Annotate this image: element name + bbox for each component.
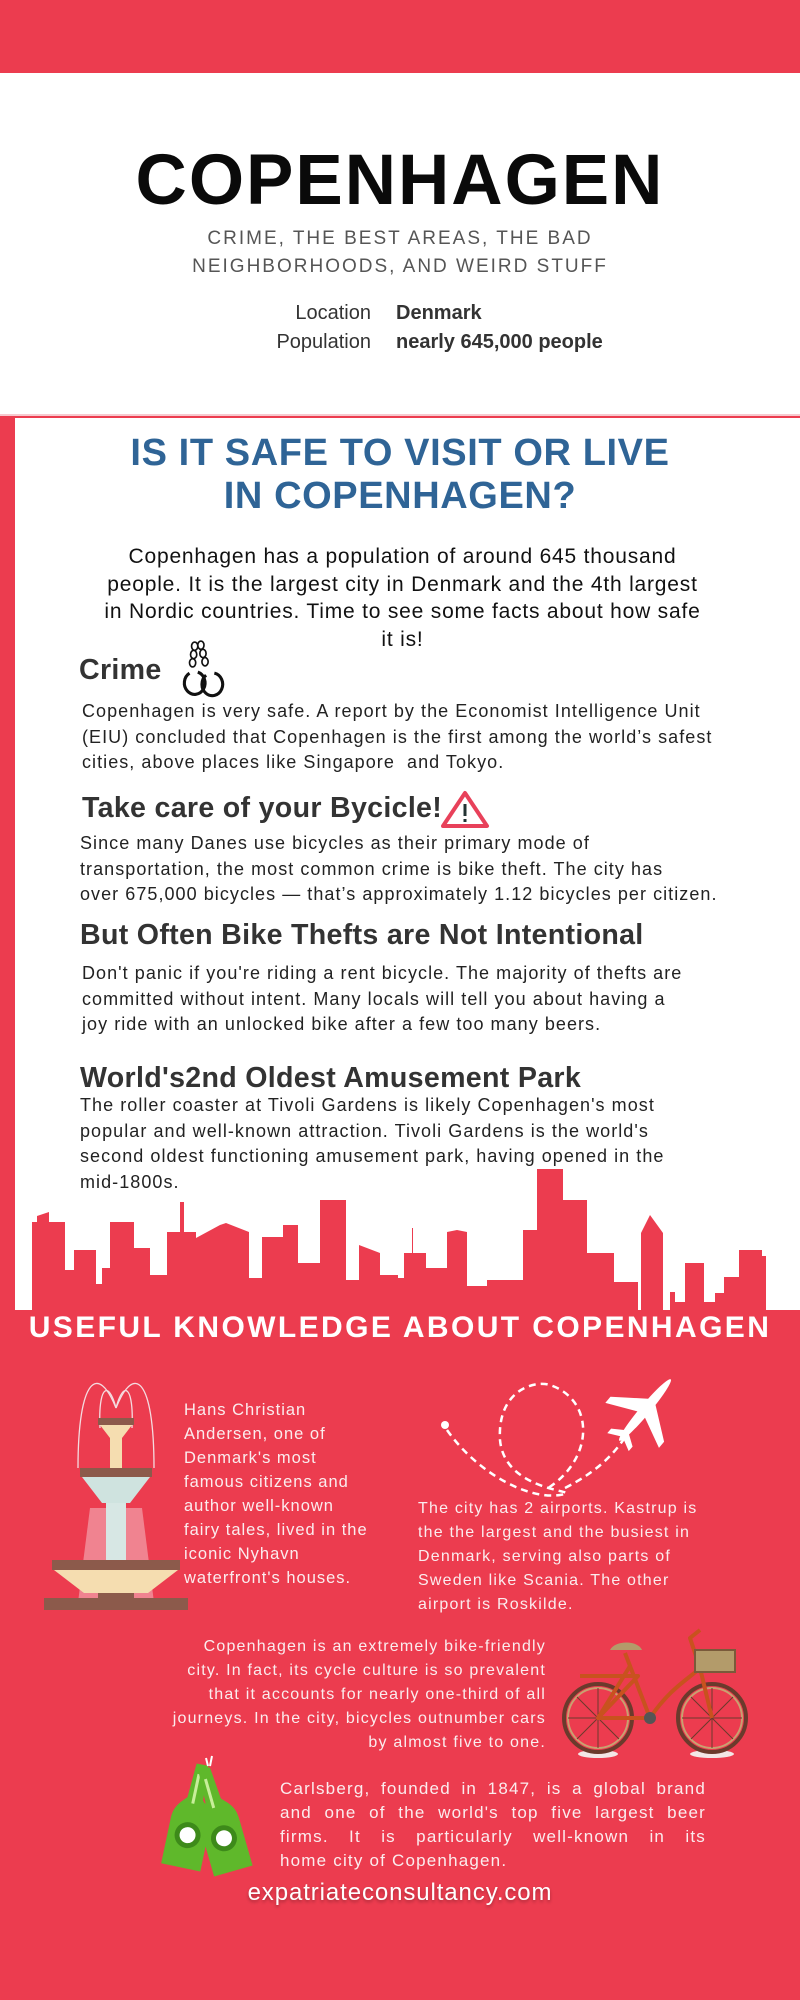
intro paragraph: Copenhagen has a population of around 645 thousand [129, 545, 676, 568]
bike text: Copenhagen is an extremely bike-friendly [204, 1638, 546, 1655]
location info: nearly 645,000 people [396, 331, 603, 353]
HCA text: famous citizens and [184, 1473, 349, 1491]
footer url: expatriateconsultancy.com [248, 1879, 552, 1906]
HCA text: author well-known [184, 1497, 334, 1515]
icon: beer bottles [161, 1756, 252, 1876]
crime text: cities, above places like Singapore and Tokyo. [82, 752, 504, 772]
intro paragraph: it is! [381, 628, 424, 650]
HCA text [184, 1401, 368, 1587]
intro paragraph: people. It is the largest city in Denmark and the 4th largest [107, 572, 698, 596]
airport text: airport is Roskilde. [418, 1596, 574, 1613]
airport text: The city has 2 airports. Kastrup is [418, 1500, 697, 1517]
location info: Population [276, 331, 371, 353]
icon: fountain [44, 1382, 188, 1610]
HCA text: waterfront's houses. [184, 1569, 351, 1587]
subtitle: NEIGHBORHOODS, AND WEIRD STUFF [192, 256, 608, 277]
title: COPENHAGEN [136, 141, 664, 220]
carlsberg text: and one of the world's top five largest beer [280, 1803, 706, 1822]
HCA text: iconic Nyhavn [184, 1545, 300, 1563]
bike text [172, 1638, 546, 1751]
park heading: World's2nd Oldest Amusement Park [80, 1062, 581, 1094]
airport text: Sweden like Scania. The other [418, 1572, 670, 1589]
airport text: the the largest and the busiest in [418, 1524, 690, 1541]
subtitle [192, 228, 608, 277]
crime heading: Crime [79, 654, 162, 686]
bike text: journeys. In the city, bicycles outnumber cars [173, 1710, 546, 1727]
park text: mid-1800s. [80, 1172, 180, 1192]
safety heading: IN COPENHAGEN? [224, 475, 576, 517]
top red bar [0, 0, 800, 73]
bike text: by almost five to one. [368, 1734, 546, 1751]
airport text [418, 1500, 697, 1613]
HCA text: Denmark's most [184, 1449, 317, 1467]
location info: Location [295, 302, 371, 324]
safety heading: IS IT SAFE TO VISIT OR LIVE [130, 432, 670, 474]
bike text: city. In fact, its cycle culture is so prevalent [187, 1662, 546, 1679]
carlsberg text: firms. It is particularly well-known in its [280, 1827, 706, 1846]
thefts text [82, 963, 682, 1034]
safety heading [130, 432, 670, 517]
crime text [82, 701, 712, 772]
header panel [0, 73, 800, 416]
bike text: that it accounts for nearly one-third of all [209, 1686, 546, 1703]
carlsberg text: Carlsberg, founded in 1847, is a global brand [280, 1779, 706, 1798]
main white panel [15, 418, 800, 1310]
park text [80, 1095, 664, 1192]
thefts text: Don't panic if you're riding a rent bicycle. The majority of thefts are [82, 963, 682, 983]
intro paragraph [104, 545, 701, 650]
carlsberg text: home city of Copenhagen. [280, 1851, 507, 1870]
section heading: useful knowledge: USEFUL KNOWLEDGE ABOUT COPENHAGEN [29, 1311, 771, 1344]
park text: popular and well-known attraction. Tivoli Gardens is the world's [80, 1120, 649, 1140]
skyline [32, 1169, 766, 1310]
icon: handcuffs [182, 640, 224, 698]
subtitle: CRIME, THE BEST AREAS, THE BAD [207, 228, 593, 249]
HCA text: Andersen, one of [184, 1425, 326, 1443]
crime text: Copenhagen is very safe. A report by the Economist Intelligence Unit [82, 701, 701, 721]
carlsberg text [280, 1779, 706, 1870]
icon: warning [441, 790, 490, 828]
thefts heading: But Often Bike Thefts are Not Intentional [80, 919, 644, 951]
park text: The roller coaster at Tivoli Gardens is likely Copenhagen's most [80, 1095, 655, 1115]
HCA text: fairy tales, lived in the [184, 1521, 368, 1539]
bicycle text: Since many Danes use bicycles as their primary mode of [80, 833, 590, 853]
thefts text: committed without intent. Many locals will tell you about having a [82, 988, 666, 1008]
crime heading [79, 640, 224, 698]
bicycle text: over 675,000 bicycles — that’s approximately 1.12 bicycles per citizen. [80, 884, 718, 904]
location info: Denmark [396, 302, 482, 324]
thefts text: joy ride with an unlocked bike after a few too many beers. [82, 1014, 601, 1034]
airport text: Denmark, serving also parts of [418, 1548, 671, 1565]
HCA text: Hans Christian [184, 1401, 306, 1419]
bicycle heading: Take care of your Bycicle! [82, 792, 442, 824]
park text: second oldest functioning amusement park, having opened in the [80, 1146, 664, 1166]
bicycle text: transportation, the most common crime is bike theft. The city has [80, 858, 663, 878]
icon: bicycle [562, 1628, 748, 1758]
intro paragraph: in Nordic countries. Time to see some facts about how safe [104, 600, 701, 623]
bicycle text [80, 833, 718, 904]
icon: plane with dashed route [441, 1379, 671, 1497]
location info [276, 302, 603, 353]
crime text: (EIU) concluded that Copenhagen is the first among the world’s safest [82, 726, 712, 746]
